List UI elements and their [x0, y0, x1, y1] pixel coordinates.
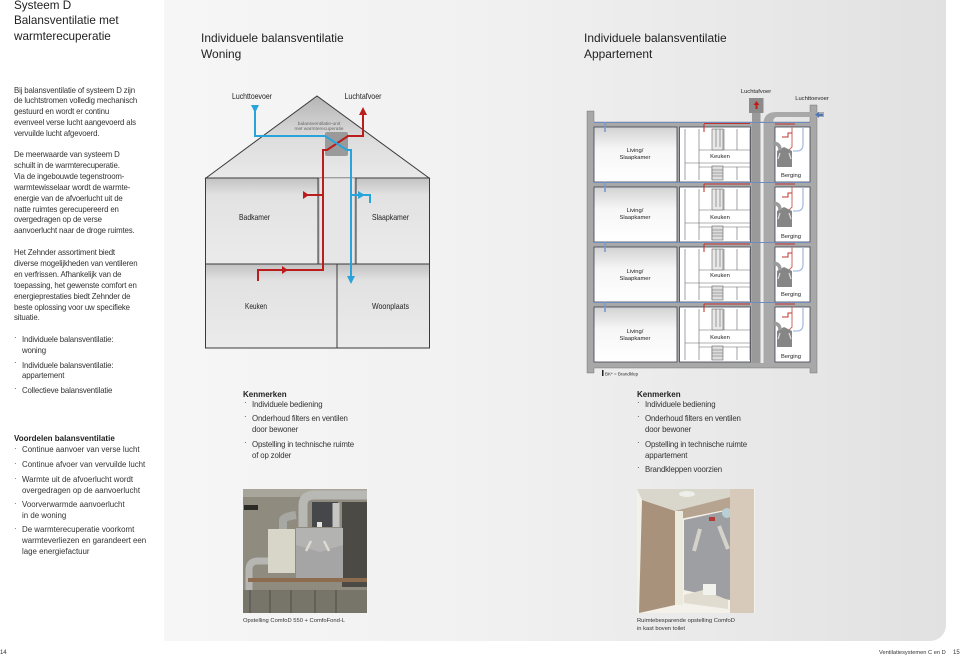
list: benefits: · [14, 444, 17, 453]
text block: Zehnder range: beste oplossing voor uw specifieke [14, 303, 130, 312]
legend: brandklep [602, 370, 639, 376]
diagram: house: balansventilatie-unit [298, 121, 341, 127]
list: benefits: · [14, 524, 17, 532]
labels: Luchtafvoer [741, 89, 771, 95]
list: benefits: warmteverliezen en garandeert een [22, 536, 146, 544]
list: ventilation types [14, 333, 113, 395]
labels: Keuken [710, 273, 730, 279]
text block: introduction: gestuurd en wordt er continu [14, 107, 109, 116]
labels: Badkamer [239, 212, 270, 222]
list: benefits [14, 434, 146, 556]
roof [206, 96, 429, 178]
text block: Zehnder range: toepassing, het gewenste comfort en [14, 281, 137, 290]
list: ventilation types: Individuele balansventilatie: [22, 335, 113, 344]
text block: Zehnder range [14, 248, 138, 322]
list: benefits: lage energiefactuur [22, 546, 90, 556]
text block: kenmerken woning [243, 390, 354, 460]
blue supply duct [255, 108, 370, 278]
diagram: house: met warmterecuperatie [294, 126, 344, 132]
labels: Berging [781, 354, 801, 360]
text block: added value: schuilt in de warmterecuperatie. [14, 161, 120, 170]
labels: Living/ [627, 148, 644, 154]
labels [232, 91, 409, 311]
list: ventilation types: woning [22, 346, 46, 355]
caption: photo right [637, 618, 735, 632]
structure walls [587, 105, 817, 373]
text block: kenmerken appartement: appartement [645, 451, 687, 460]
text block: added value: De meerwaarde van systeem D [14, 150, 120, 159]
labels: Luchtafvoer [344, 91, 382, 101]
text block: kenmerken appartement: · [637, 412, 639, 421]
text block: added value: aanvoerlucht naar de droge ruimtes. [14, 226, 135, 235]
list: ventilation types: Collectieve balansventilatie [22, 386, 112, 395]
title: warmterecuperatie [14, 30, 111, 43]
heading: appartement: Appartement [584, 47, 652, 61]
labels: Berging [781, 173, 801, 179]
text block: kenmerken appartement: Opstelling in technische ruimte [645, 440, 747, 449]
labels: Luchttoevoer [232, 91, 272, 101]
labels [620, 89, 829, 360]
legend: brandklep: BK* = Brandklep [605, 372, 639, 376]
caption: photo right: Ruimtebesparende opstelling ComfoD [637, 618, 735, 624]
list: benefits: · [14, 458, 17, 468]
text block: kenmerken woning: Kenmerken [243, 390, 287, 399]
text block: added value [14, 150, 135, 235]
labels: Slaapkamer [620, 276, 651, 282]
floors [594, 127, 810, 182]
text block: kenmerken appartement: Onderhoud filters en ventilen [645, 414, 741, 423]
text block: introduction: vervuilde lucht afgevoerd. [14, 129, 99, 138]
text block: Zehnder range: en verfrissen. Afhankelijk van de [14, 270, 121, 279]
labels: Keuken [710, 335, 730, 341]
text block: Zehnder range: Het Zehnder assortiment biedt [14, 248, 115, 257]
text block: kenmerken woning: · [244, 438, 246, 447]
heading: woning: Individuele balansventilatie [201, 31, 344, 45]
text block: kenmerken woning: of op zolder [252, 451, 291, 460]
list: ventilation types: · [14, 384, 16, 393]
title [14, 0, 119, 43]
labels: Slaapkamer [620, 155, 651, 161]
heading: appartement [584, 31, 727, 61]
list: ventilation types: appartement [22, 371, 64, 380]
page number left: 14 [0, 650, 6, 656]
text block: kenmerken woning: · [244, 412, 246, 421]
text block: kenmerken appartement: · [637, 438, 639, 447]
list: ventilation types: Individuele balansventilatie: [22, 360, 113, 370]
labels: Keuken [245, 301, 267, 311]
list: ventilation types: · [14, 333, 16, 342]
text block: added value: warmtewisselaar wordt de warmte- [14, 183, 130, 192]
heading: woning: Woning [201, 47, 241, 61]
labels: Living/ [627, 269, 644, 275]
text block: kenmerken woning: Opstelling in technische ruimte [252, 440, 354, 449]
text block: kenmerken appartement: · [637, 463, 639, 472]
text block: kenmerken woning: Individuele bediening [252, 400, 322, 409]
supply and exhaust lines [594, 122, 810, 312]
red exhaust duct [258, 112, 363, 281]
text block: Zehnder range: situatie. [14, 313, 40, 322]
list: benefits: Voorverwarmde aanvoerlucht [22, 500, 125, 509]
text block: kenmerken woning: Onderhoud filters en ventilen [252, 414, 348, 423]
rooms [206, 178, 430, 348]
list: benefits: Continue aanvoer van verse lucht [22, 445, 140, 454]
list: benefits: De warmterecuperatie voorkomt [22, 524, 134, 534]
text block: added value: natte ruimtes gerecupereerd en [14, 205, 119, 214]
page number right: 15 [953, 650, 960, 656]
footer right: Ventilatiesystemen C en D [879, 650, 946, 656]
diagram: house [206, 91, 430, 348]
list: ventilation types: · [14, 358, 16, 367]
list: benefits: · [14, 474, 17, 482]
labels: Berging [781, 292, 801, 298]
text block: Zehnder range: energieprestaties biedt Zehnder de [14, 292, 130, 301]
heading: appartement: Individuele balansventilatie [584, 31, 727, 45]
text block: kenmerken woning: door bewoner [252, 425, 298, 434]
caption: photo right: in kast boven toilet [637, 626, 685, 632]
text block: introduction: evenveel verse lucht aangevoerd als [14, 118, 136, 127]
diagram: apartment [587, 89, 829, 376]
labels: Living/ [627, 329, 644, 335]
text block: introduction [14, 86, 137, 138]
list: benefits: Warmte uit de afvoerlucht wordt [22, 474, 133, 484]
text block: kenmerken appartement [637, 390, 747, 474]
labels: Slaapkamer [372, 212, 409, 222]
photo: ComfoD in cupboard [637, 489, 755, 613]
heading: woning [201, 31, 344, 61]
text block: introduction: Bij balansventilatie of systeem D zijn [14, 86, 135, 94]
text block: kenmerken appartement: Individuele bediening [645, 400, 715, 409]
labels: Keuken [710, 215, 730, 221]
text block: Zehnder range: diverse mogelijkheden van ventileren [14, 259, 137, 268]
list: benefits: Continue afvoer van vervuilde lucht [22, 460, 145, 468]
text block: kenmerken appartement: Kenmerken [637, 390, 681, 399]
text block: kenmerken appartement: door bewoner [645, 425, 691, 434]
labels: Woonplaats [372, 301, 409, 311]
text block: kenmerken appartement: Brandkleppen voorzien [645, 465, 722, 474]
text block: introduction: de luchtstromen volledig mechanisch [14, 96, 137, 105]
list: benefits: · [14, 499, 17, 508]
labels: Living/ [627, 208, 644, 214]
labels: Berging [781, 234, 801, 240]
photo: ComfoD 550 installation [243, 489, 367, 613]
labels: Slaapkamer [620, 215, 651, 221]
list: benefits: overgedragen op de aanvoerlucht [22, 486, 140, 494]
ducts [752, 113, 760, 363]
list: benefits: in de woning [22, 511, 66, 520]
text block: kenmerken woning: · [244, 398, 246, 407]
text block: added value: overgedragen op de verse [14, 215, 102, 224]
unit [325, 132, 348, 156]
text block: added value: energie van de afvoerlucht uit de [14, 194, 123, 203]
labels: Luchttoevoer [795, 96, 829, 102]
title: Balansventilatie met [14, 14, 119, 27]
labels: Keuken [710, 154, 730, 160]
labels: Slaapkamer [620, 336, 651, 342]
caption: photo left: Opstelling ComfoD 550 + ComfoFond-L [243, 618, 345, 624]
text block: kenmerken appartement: · [637, 398, 639, 407]
list: benefits: Voordelen balansventilatie [14, 434, 115, 443]
text block: added value: Via de ingebouwde tegenstroom- [14, 172, 124, 181]
panel: grey background [164, 0, 946, 641]
